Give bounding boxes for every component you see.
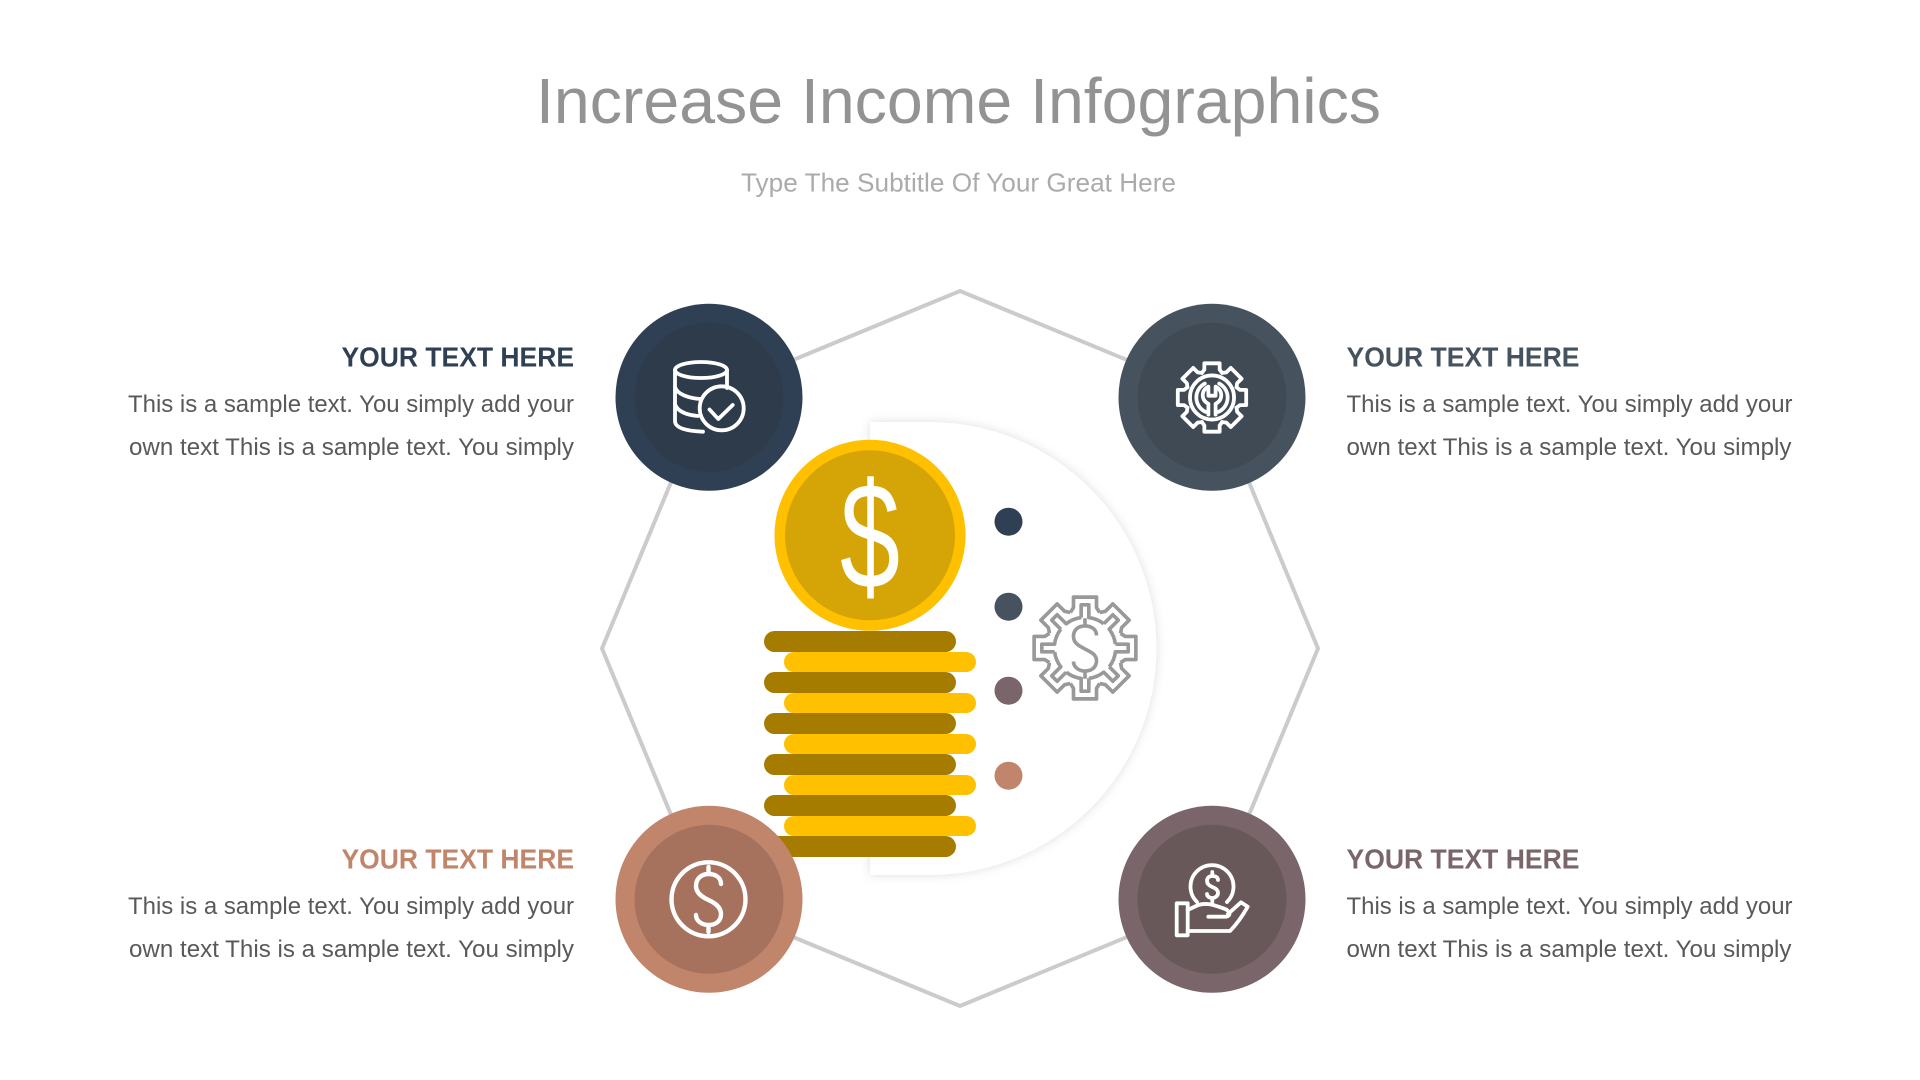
text block: bottom right: This is a sample text. You simply add your [1346,893,1792,920]
text block: bottom left: YOUR TEXT HERE [342,844,574,875]
coin stack [764,631,976,857]
text block: top left: YOUR TEXT HERE [342,342,574,373]
panel: top left circle [616,304,802,491]
text block: top right: YOUR TEXT HERE [1346,342,1580,373]
icon: dollar coin [672,862,746,936]
text block: bottom right [1346,844,1792,963]
title: Increase Income Infographics [536,65,1381,137]
text block: bottom right: own text This is a sample text. You simply [1346,936,1792,963]
icon: database check [675,362,744,432]
text block: top right: own text This is a sample text. You simply [1346,434,1792,461]
icon: gear with dollar [1034,597,1136,699]
colored legend dots [994,508,1022,790]
text block: top right: This is a sample text. You simply add your [1346,391,1792,418]
panel: bottom left circle [616,806,802,993]
text block: bottom right: YOUR TEXT HERE [1346,844,1580,875]
text block: top left: own text This is a sample text. You simply [129,434,574,461]
text block: top right [1346,342,1792,461]
icon: gear with wrench [1178,363,1246,432]
text block: bottom left: This is a sample text. You simply add your [128,893,574,920]
text block: top left: This is a sample text. You simply add your [128,391,574,418]
panel: bottom right circle [1118,806,1306,993]
octagon outline [602,291,1318,1006]
icon: big dollar coin [774,440,966,631]
subtitle: Type The Subtitle Of Your Great Here [741,168,1176,198]
panel: central D shape [870,422,1156,875]
icon: big dollar coin: $ [840,451,900,620]
text block: top left [128,342,574,461]
icon: hand holding coin [1177,865,1248,935]
text block: bottom left [128,844,574,963]
panel: top right circle [1118,304,1306,491]
text block: bottom left: own text This is a sample text. You simply [129,936,574,963]
